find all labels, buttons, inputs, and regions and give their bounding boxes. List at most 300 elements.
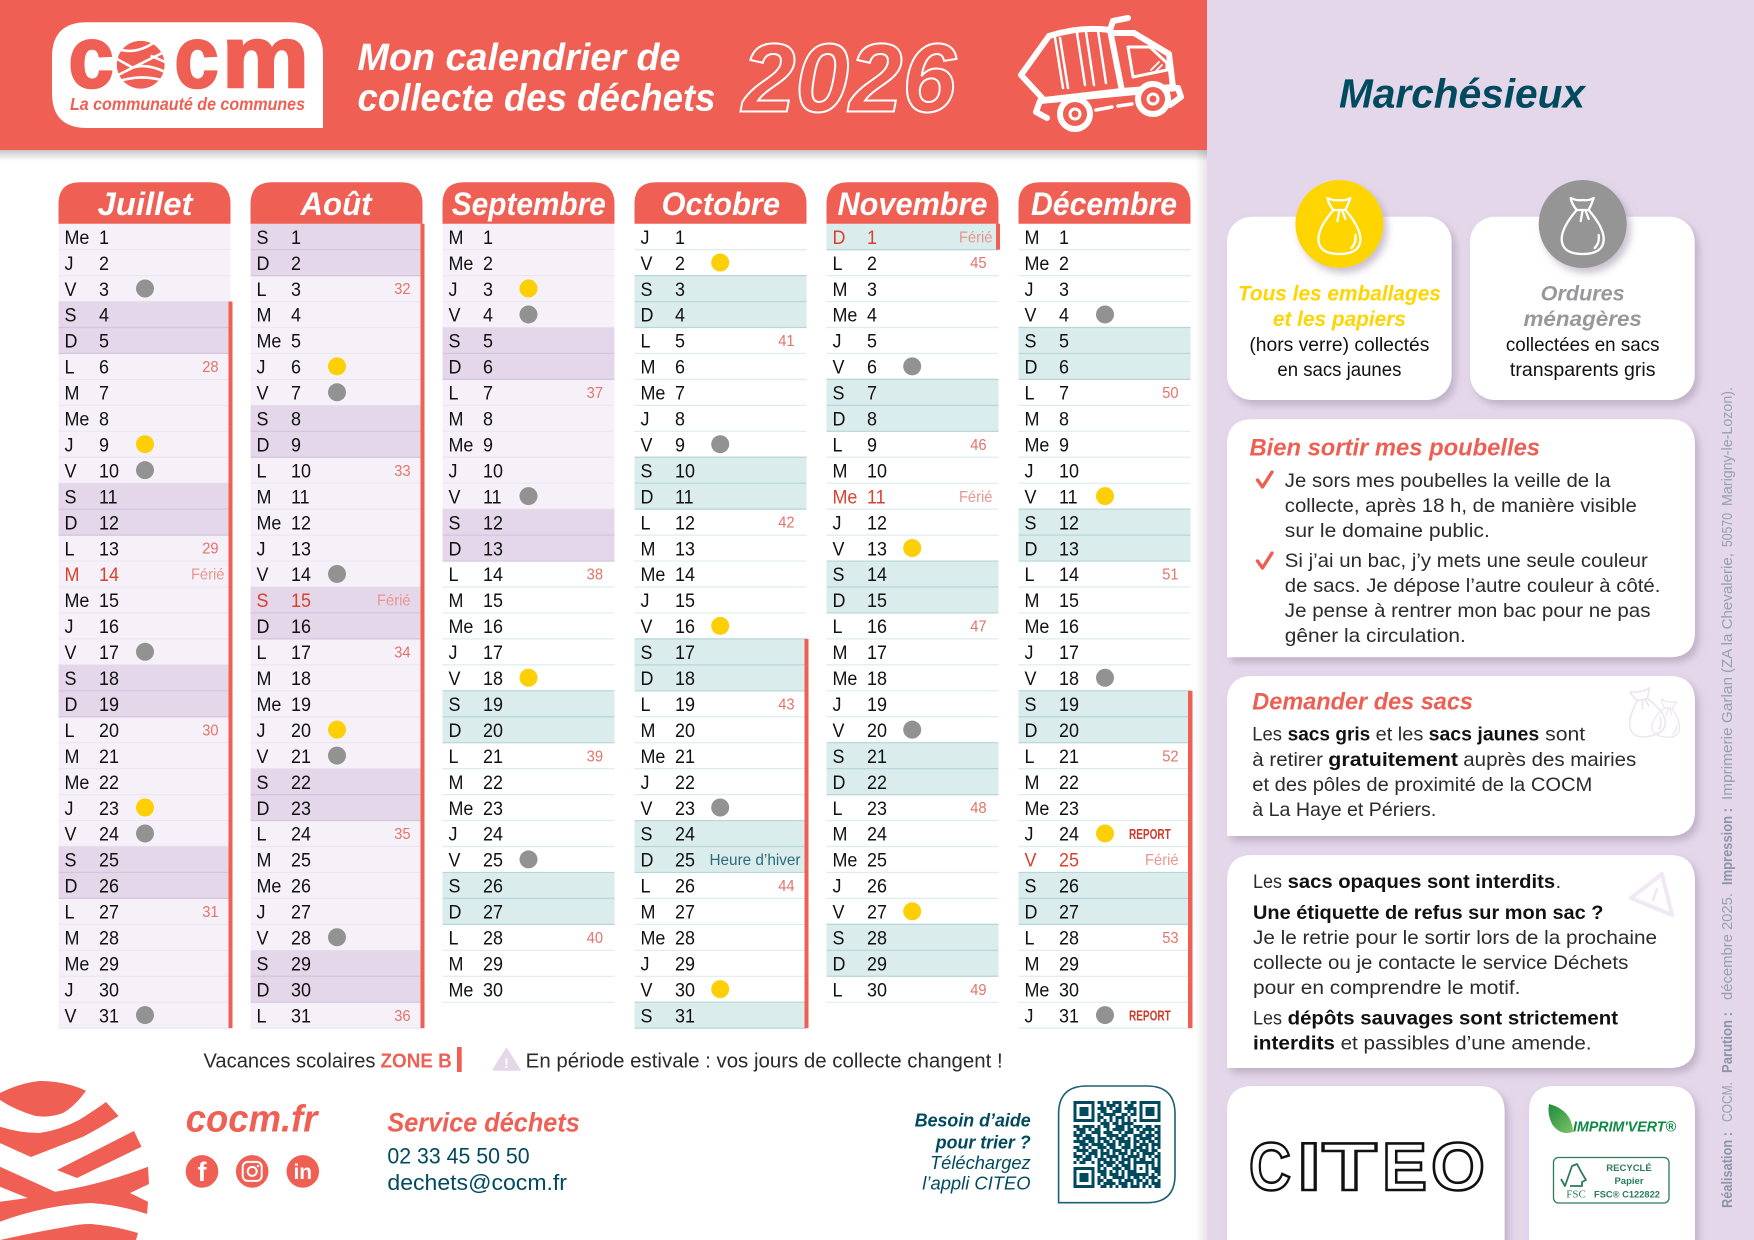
card heading: ménagères [1524, 307, 1642, 331]
day list: 17 [291, 641, 311, 663]
day list: V [832, 538, 844, 559]
day list: 22 [867, 771, 887, 793]
body text: Une étiquette de refus sur mon sac ? [1253, 902, 1604, 924]
day list: D [832, 953, 845, 975]
vertical credits: Réalisation : [1719, 1132, 1736, 1208]
day list: V [256, 745, 268, 767]
school holiday bar [1188, 691, 1192, 1028]
day list: S [448, 330, 460, 352]
day list: V [1024, 667, 1036, 689]
body text: auprès des mairies [1463, 749, 1637, 771]
week numbers and holiday notes [959, 229, 992, 999]
day list: M [64, 382, 79, 404]
month heading [250, 182, 422, 224]
day list: 19 [291, 693, 311, 715]
day list: S [448, 875, 460, 897]
school holiday bar [228, 302, 232, 1028]
panel: Décembre [1018, 182, 1192, 1028]
day list: 24 [291, 823, 311, 845]
day list: L [256, 278, 266, 300]
card text [1249, 334, 1430, 381]
day list: Me [448, 979, 473, 1001]
day list: 16 [483, 615, 503, 637]
day list: 11 [867, 486, 886, 508]
day list: V [640, 615, 652, 637]
day list: 14 [867, 564, 887, 585]
day list: 15 [867, 590, 887, 611]
day list: S [256, 953, 268, 975]
body text: à retirer [1252, 749, 1324, 771]
day list: 6 [483, 356, 493, 378]
week numbers and holiday notes: 48 [970, 800, 987, 817]
contact: service déchets: Service déchets [387, 1108, 580, 1138]
vertical credits: décembre 2025. [1719, 893, 1736, 1000]
body text: sont [1545, 724, 1586, 746]
icon: facebook: f [198, 1157, 208, 1187]
day list: 3 [1059, 278, 1069, 300]
day list: 28 [675, 927, 695, 949]
day list: M [640, 719, 655, 741]
day list: 28 [483, 927, 503, 949]
day list: J [832, 693, 841, 715]
day list: 30 [675, 979, 695, 1001]
logo: FSC recycled [1554, 1158, 1669, 1203]
day list: M [1024, 590, 1039, 611]
card: yellow bags [1227, 180, 1452, 400]
day list: M [256, 486, 271, 508]
day list: 21 [483, 745, 503, 767]
day list: 29 [675, 953, 695, 975]
week numbers and holiday notes: 46 [970, 436, 987, 454]
day list: 21 [1059, 745, 1079, 767]
day list: 11 [291, 486, 310, 508]
day list: 25 [1059, 849, 1079, 871]
day list: 22 [483, 771, 503, 793]
day list: 22 [291, 771, 311, 793]
body text: Les [1253, 1008, 1282, 1030]
week numbers and holiday note: 50 [1162, 384, 1179, 402]
day list: Me [832, 304, 857, 326]
day list: 12 [1059, 512, 1079, 534]
day list: 2 [867, 252, 877, 274]
day list: 9 [291, 434, 301, 456]
day list: 21 [867, 745, 887, 767]
day list: 4 [675, 304, 685, 326]
month heading: Novembre [838, 186, 988, 222]
day list: 11 [483, 486, 502, 508]
bullet text [1285, 470, 1660, 647]
day list: D [448, 356, 461, 378]
day list: S [64, 486, 76, 508]
day list: L [832, 252, 842, 274]
day list: 2 [1059, 252, 1069, 274]
day list: S [64, 849, 76, 871]
day list: D [256, 252, 269, 274]
report notes: REPORT [1129, 1009, 1171, 1025]
day list: Me [1024, 979, 1049, 1001]
day list: 5 [483, 330, 493, 352]
legend: summer notice: En période estivale : vos jours de collecte changent ! [526, 1050, 1003, 1072]
week numbers and holiday note: 34 [394, 644, 411, 662]
day list: 19 [867, 693, 887, 715]
day list: 1 [867, 226, 877, 248]
day list: 22 [1059, 771, 1079, 793]
day list: 17 [99, 641, 119, 663]
body text: gratuitement [1328, 749, 1459, 771]
logo: COCM: c [174, 9, 218, 106]
day list: 13 [483, 538, 503, 559]
day list: V [1024, 304, 1036, 326]
heading: Bien sortir mes poubelles [1250, 434, 1540, 461]
day list: D [64, 330, 77, 352]
day list: 16 [291, 615, 311, 637]
day list: 14 [291, 564, 311, 585]
day list: Me [448, 797, 473, 819]
day list: 24 [483, 823, 503, 845]
day list: L [256, 641, 266, 663]
vertical credits: Imprimerie Garlan [1719, 677, 1736, 800]
day list: 19 [483, 693, 503, 715]
day list: J [256, 356, 265, 378]
day list: 18 [675, 667, 695, 689]
day list: L [448, 927, 458, 949]
card text: collectées en sacs [1506, 334, 1660, 356]
day list: 6 [99, 356, 109, 378]
day list: Me [64, 590, 89, 611]
day list: S [256, 590, 268, 611]
day list: 7 [483, 382, 493, 404]
day list: S [64, 667, 76, 689]
logo: FSC recycled: FSC [1566, 1188, 1586, 1200]
body text [1253, 871, 1657, 1055]
day list: 23 [291, 797, 311, 819]
day list: D [832, 226, 845, 248]
day list: 12 [99, 512, 119, 534]
day list: 3 [867, 278, 877, 300]
day list: D [64, 875, 77, 897]
day list: Me [1024, 252, 1049, 274]
day list: D [256, 979, 269, 1001]
day list: M [64, 927, 79, 949]
day list: J [256, 719, 265, 741]
day list: J [832, 330, 841, 352]
body text: et les [1376, 724, 1424, 746]
card heading: Ordures [1541, 282, 1625, 306]
day list: 11 [99, 486, 118, 508]
day list: 4 [99, 304, 109, 326]
day list: 10 [99, 460, 119, 482]
day list: 27 [675, 901, 695, 923]
day list: 7 [867, 382, 877, 404]
day list: 28 [1059, 927, 1079, 949]
week numbers and holiday note: 52 [1162, 748, 1179, 765]
day list: J [1024, 460, 1033, 482]
day list [64, 226, 119, 1027]
day list: L [64, 719, 74, 741]
day list: S [832, 927, 844, 949]
icon: garbage truck [1021, 18, 1181, 129]
school holiday bar [996, 224, 1000, 250]
day list: 20 [483, 719, 503, 741]
body text: et des pôles de proximité de la COCM [1252, 774, 1592, 796]
month heading [58, 182, 230, 224]
day list: L [256, 1005, 266, 1027]
card: CITEO logo: T [1322, 1129, 1377, 1205]
day list: D [256, 615, 269, 637]
day list: D [832, 590, 845, 611]
day list: 13 [675, 538, 695, 559]
day list: V [448, 486, 460, 508]
day list: 23 [1059, 797, 1079, 819]
week numbers and holiday note: Férié [377, 592, 411, 610]
day list: 2 [483, 252, 493, 274]
icon: yellow bag [1295, 180, 1383, 268]
title: collecte des déchets [358, 78, 716, 120]
logo: COCM [52, 22, 323, 128]
week numbers: 40 [587, 929, 603, 947]
day list: 20 [99, 719, 119, 741]
collection dots [903, 357, 921, 920]
day list: M [832, 460, 847, 482]
day list: 18 [99, 667, 119, 689]
day list: Me [640, 564, 665, 585]
day list: 31 [1059, 1005, 1079, 1027]
day list: 1 [675, 226, 685, 248]
day list: J [256, 538, 265, 559]
day list: D [640, 849, 653, 871]
day list: 3 [675, 278, 685, 300]
day list: 9 [675, 434, 685, 456]
day list: 10 [291, 460, 311, 482]
week numbers and holiday note: 35 [394, 826, 411, 843]
day list: V [832, 719, 844, 741]
day list: 29 [483, 953, 503, 975]
panel: Bien sortir mes poubelles [1227, 419, 1695, 657]
week numbers [587, 384, 603, 947]
day list: 6 [291, 356, 301, 378]
day list: 25 [291, 849, 311, 871]
day list: L [1024, 564, 1034, 585]
day list: M [448, 226, 463, 248]
heading: Demander des sacs [1252, 688, 1473, 715]
day list: 12 [291, 512, 311, 534]
day list: D [1024, 356, 1037, 378]
panel: Demander des sacs [1227, 676, 1695, 836]
day list: 1 [99, 226, 109, 248]
week numbers and holiday note: Férié [191, 566, 224, 584]
day list: 23 [99, 797, 119, 819]
legend: school holidays [204, 1047, 462, 1072]
body text: et passibles d’une amende. [1341, 1033, 1592, 1055]
report notes: REPORT [1129, 827, 1171, 843]
day list: 9 [483, 434, 493, 456]
bullet text: collecte, après 18 h, de manière visible [1285, 495, 1637, 517]
logo: FSC recycled: FSC® C122822 [1594, 1190, 1660, 1200]
day list: D [256, 797, 269, 819]
day list [640, 226, 695, 1027]
collection dots [136, 280, 154, 1024]
day list: 28 [99, 927, 119, 949]
day list: S [256, 226, 268, 248]
week numbers and holiday note: 28 [202, 358, 219, 376]
day list: Me [832, 849, 857, 871]
collection dots [328, 357, 346, 946]
week numbers and holiday note [377, 281, 411, 1025]
week numbers and holiday notes: Férié [959, 229, 992, 246]
day list: J [64, 434, 73, 456]
day list: 8 [867, 408, 877, 430]
day list: L [256, 823, 266, 845]
legend: summer notice: ! [504, 1055, 509, 1071]
day list [256, 226, 311, 1027]
day list: 9 [867, 434, 877, 456]
card heading: et les papiers [1273, 307, 1406, 331]
day list: 21 [99, 745, 119, 767]
day list: J [64, 797, 73, 819]
day list: 2 [675, 252, 685, 274]
week numbers [778, 333, 795, 895]
day list: L [1024, 927, 1034, 949]
day list: 30 [99, 979, 119, 1001]
panel: Août [250, 182, 424, 1028]
day list: V [448, 849, 460, 871]
day list: D [448, 538, 461, 559]
day list: 24 [99, 823, 119, 845]
bullet text: Je pense à rentrer mon bac pour ne pas [1285, 600, 1651, 622]
icon: faint bags [1623, 686, 1683, 740]
day list: 18 [867, 667, 887, 689]
help text: Téléchargez [930, 1152, 1031, 1173]
day list: 6 [867, 356, 877, 378]
day list: L [256, 460, 266, 482]
bullet text: de sacs. Je dépose l’autre couleur à côté. [1285, 575, 1660, 597]
day list: 30 [291, 979, 311, 1001]
social icons [186, 1155, 319, 1188]
day list: 9 [99, 434, 109, 456]
day list: 27 [1059, 901, 1079, 923]
day list: V [832, 356, 844, 378]
day list: M [1024, 953, 1039, 975]
day list: Me [448, 252, 473, 274]
header band [0, 0, 1207, 161]
day list: 13 [291, 538, 311, 559]
day list: J [448, 278, 457, 300]
day list: M [448, 771, 463, 793]
day list: 15 [291, 590, 311, 611]
day list: 2 [291, 252, 301, 274]
day list: 23 [483, 797, 503, 819]
day list: 18 [483, 667, 503, 689]
week numbers and holiday note [191, 358, 224, 921]
day list: 6 [675, 356, 685, 378]
logo: Imprim'Vert [1548, 1104, 1676, 1136]
day list: 4 [483, 304, 493, 326]
day list: 31 [675, 1005, 695, 1027]
day list: D [448, 719, 461, 741]
weekend bands [442, 328, 614, 924]
week numbers and holiday notes: Férié [959, 488, 992, 506]
week numbers: 38 [587, 566, 603, 584]
day list: Me [1024, 797, 1049, 819]
day list: S [64, 304, 76, 326]
bullet text: sur le domaine public. [1285, 520, 1490, 542]
day list: J [448, 823, 457, 845]
logo: FSC recycled: Papier [1614, 1176, 1644, 1187]
day list [832, 226, 887, 1001]
week numbers: 41 [778, 333, 795, 350]
day list: 17 [1059, 641, 1079, 663]
day list: 27 [291, 901, 311, 923]
day list: V [64, 1005, 76, 1027]
card text: (hors verre) collectés [1249, 334, 1430, 356]
day list: 1 [291, 226, 301, 248]
icon: check marks [1258, 472, 1272, 568]
day list: 1 [1059, 226, 1069, 248]
day list: S [640, 278, 652, 300]
day list: 15 [1059, 590, 1079, 611]
day list: S [448, 512, 460, 534]
day list: D [64, 512, 77, 534]
body text: interdits [1253, 1033, 1335, 1055]
body text: Les [1252, 724, 1282, 746]
day list: 29 [291, 953, 311, 975]
day list: M [256, 849, 271, 871]
day list: L [640, 330, 650, 352]
weekend bands [826, 224, 998, 976]
weekend bands [1018, 328, 1190, 924]
day list: 20 [291, 719, 311, 741]
day list: D [832, 771, 845, 793]
day list: M [64, 564, 79, 585]
weekend bands [634, 276, 806, 1028]
report notes [1129, 827, 1171, 1025]
day list: V [1024, 849, 1036, 871]
day list: J [832, 512, 841, 534]
card: CITEO logo [1227, 1086, 1505, 1240]
day list: V [640, 252, 652, 274]
day list: 29 [867, 953, 887, 975]
day list: Me [256, 512, 281, 534]
day list: Me [448, 434, 473, 456]
day list: 25 [867, 849, 887, 871]
day list: 7 [675, 382, 685, 404]
collection dots [520, 280, 538, 868]
day list: 30 [867, 979, 887, 1001]
contact: service déchets: 02 33 45 50 50 [387, 1143, 530, 1168]
day list: L [832, 979, 842, 1001]
sidebar edge shadow [1195, 150, 1207, 1240]
day list: 5 [291, 330, 301, 352]
month heading [634, 182, 806, 224]
day list: J [640, 771, 649, 793]
day list: 26 [99, 875, 119, 897]
week numbers and holiday note [1145, 384, 1179, 947]
card: CITEO logo: O [1431, 1129, 1485, 1205]
week numbers and holiday note: 30 [202, 722, 219, 740]
day list: 30 [483, 979, 503, 1001]
day list: 14 [675, 564, 695, 585]
day list: Me [1024, 615, 1049, 637]
day list: 24 [1059, 823, 1079, 845]
day list: Me [640, 745, 665, 767]
day list: M [832, 641, 847, 663]
card heading [1524, 282, 1642, 331]
day list: 8 [483, 408, 493, 430]
day list: M [64, 745, 79, 767]
card heading: Tous les emballages [1238, 282, 1441, 306]
day list: Me [256, 330, 281, 352]
day list: Me [832, 667, 857, 689]
